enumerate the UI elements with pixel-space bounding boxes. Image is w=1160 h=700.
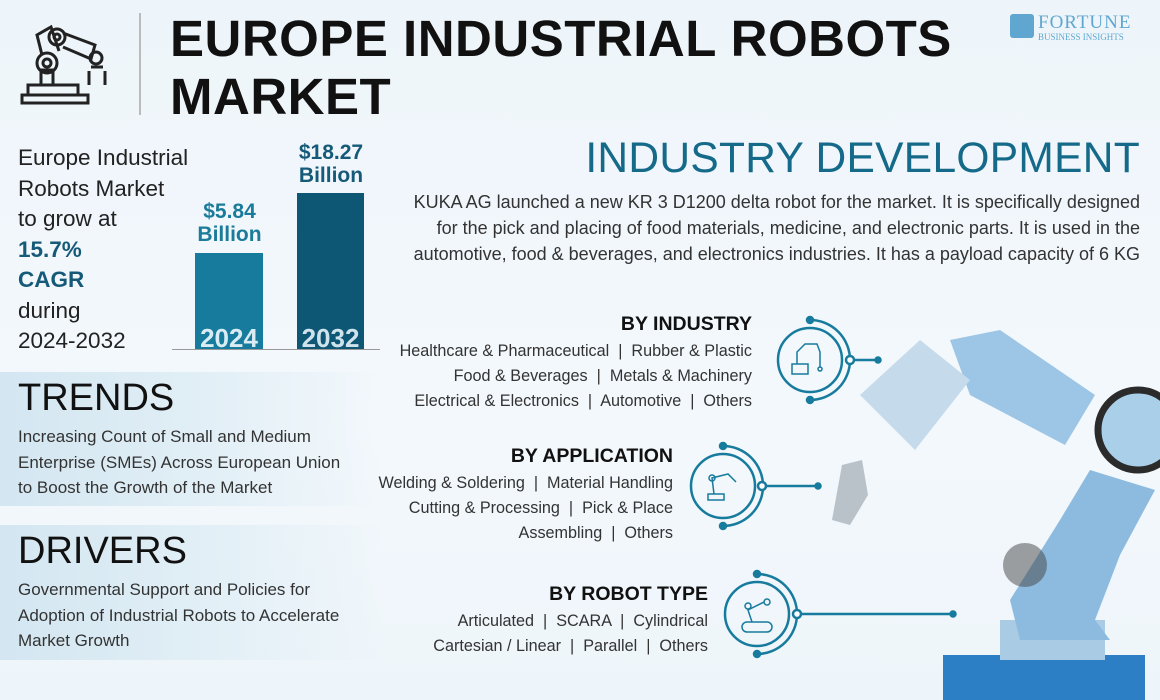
- segment: by application: Welding & Soldering | Material Handling: [378, 474, 673, 492]
- bar 2032: 2032: [302, 323, 359, 353]
- label 2032 value: $18.27: [299, 141, 363, 164]
- text: market growth: to grow at: [18, 206, 117, 231]
- text: market growth: CAGR: [18, 267, 84, 292]
- bar 2024: [195, 253, 263, 350]
- segment: by robot type: BY ROBOT TYPE: [549, 583, 708, 605]
- text: industry development: KUKA AG launched a new KR 3 D1200 delta robot for the market. It is specifically designed: [414, 192, 1140, 212]
- logo: [1010, 12, 1131, 42]
- panel: drivers: Market Growth: [18, 631, 129, 650]
- robot image: [832, 330, 1160, 700]
- label 2024 value: Billion: [197, 223, 262, 246]
- panel: trends: Enterprise (SMEs) Across European Union: [18, 452, 340, 472]
- text: market growth: Robots Market: [18, 176, 164, 200]
- text: market growth: Europe Industrial: [18, 145, 188, 170]
- icon: robot type circle: [724, 570, 957, 658]
- logo: BUSINESS INSIGHTS: [1038, 32, 1124, 42]
- bar 2024: 2024: [200, 323, 258, 353]
- segment: by industry: Food & Beverages | Metals & Machinery: [454, 367, 752, 385]
- panel: trends: to Boost the Growth of the Market: [18, 478, 272, 497]
- label 2024 value: $5.84: [203, 200, 256, 223]
- title: [170, 10, 952, 125]
- segment: by robot type: Cartesian / Linear | Parallel | Others: [433, 637, 708, 655]
- text: industry development: automotive, food & beverages, and electronics industries. It has a payload capacity of 6 KG: [414, 244, 1140, 264]
- text: market growth: 2024-2032: [18, 328, 126, 353]
- panel: trends: TRENDS: [18, 377, 174, 419]
- text: market growth: [18, 145, 188, 353]
- title: MARKET: [170, 68, 391, 125]
- segment: by industry: Electrical & Electronics | Automotive | Others: [414, 392, 752, 410]
- icon: application circle: [690, 442, 822, 530]
- panel: trends: Increasing Count of Small and Medium: [18, 427, 311, 446]
- segment: by application: [378, 445, 673, 542]
- panel: drivers: Governmental Support and Policies for: [18, 580, 310, 599]
- bar chart: [172, 141, 380, 353]
- icon: industry circle: [776, 316, 882, 404]
- segment: by industry: Healthcare & Pharmaceutical | Rubber & Plastic: [400, 342, 752, 360]
- segment: by industry: [400, 313, 752, 410]
- text: industry development: [414, 192, 1140, 264]
- label 2032 value: [299, 141, 363, 187]
- text: market growth: 15.7%: [18, 236, 82, 262]
- divider: [139, 13, 141, 115]
- bar 2032: [297, 193, 364, 350]
- panel: drivers: Adoption of Industrial Robots to Accelerate: [18, 606, 339, 624]
- segment: by robot type: [433, 583, 708, 655]
- segment: by robot type: Articulated | SCARA | Cylindrical: [458, 612, 708, 630]
- label 2024 value: [197, 200, 262, 246]
- logo: FORTUNE: [1038, 12, 1131, 33]
- icon: robot arm outline: [20, 24, 106, 104]
- panel: trends: [0, 372, 380, 506]
- text: industry development: for the pick and placing of food materials, medicine, and electronic parts. It is used in the: [437, 218, 1140, 238]
- panel: drivers: DRIVERS: [18, 530, 187, 572]
- heading: industry development: INDUSTRY DEVELOPMENT: [585, 135, 1140, 182]
- label 2032 value: Billion: [299, 164, 363, 187]
- text: market growth: during: [18, 298, 81, 322]
- segment: by application: Assembling | Others: [519, 524, 673, 542]
- segment: by application: Cutting & Processing | Pick & Place: [409, 499, 673, 517]
- segment: by application: BY APPLICATION: [511, 445, 673, 467]
- title: EUROPE INDUSTRIAL ROBOTS: [170, 10, 952, 67]
- segment: by industry: BY INDUSTRY: [621, 313, 752, 335]
- panel: drivers: [0, 525, 380, 660]
